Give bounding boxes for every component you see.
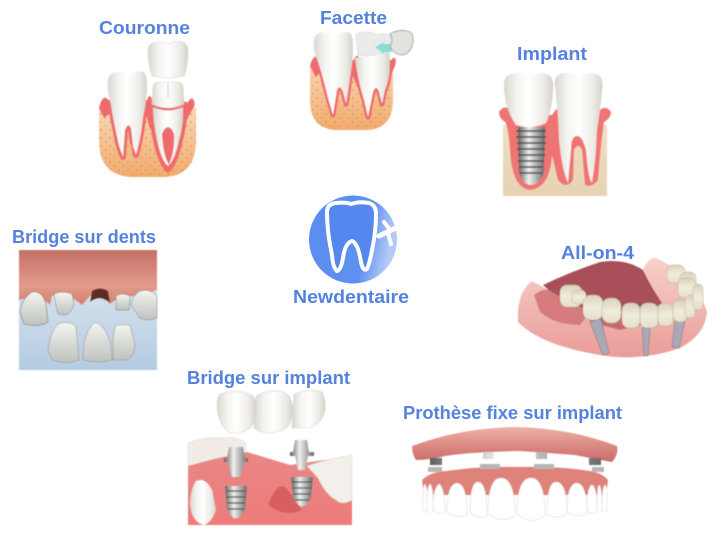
illustration: implant (499, 73, 611, 196)
teeth (20, 292, 48, 326)
heading: Couronne: Couronne (99, 18, 190, 38)
heading: All-on-4: All-on-4 (561, 243, 634, 263)
illustration: all-on-4 (518, 258, 707, 357)
heading: Implant: Implant (517, 44, 587, 64)
illustration: prothèse fixe sur implant (412, 427, 617, 521)
icon: tooth (327, 202, 376, 271)
heading: Newdentaire: Newdentaire (293, 287, 409, 307)
panel: logo Newdentaire (293, 196, 409, 307)
implant abutments (224, 447, 248, 477)
panel: couronne (99, 18, 196, 177)
panel: prothèse fixe sur implant (403, 403, 622, 521)
implants (590, 319, 609, 355)
illustration: bridge sur implant (188, 390, 352, 525)
heading: Facette: Facette (320, 8, 387, 28)
heading: Prothèse fixe sur implant: Prothèse fixe sur implant (403, 403, 622, 423)
panel: implant (499, 44, 611, 196)
illustration: facette (310, 30, 413, 130)
heading: Bridge sur implant: Bridge sur implant (187, 368, 350, 388)
bridge crowns (217, 390, 325, 433)
icon: plane (379, 222, 396, 244)
icon: arrow (375, 42, 392, 54)
illustration: couronne (99, 41, 196, 177)
heading: Bridge sur dents: Bridge sur dents (12, 227, 156, 247)
panel: all-on-4 (518, 243, 707, 357)
panel: bridge sur dents (12, 227, 157, 370)
logo badge (309, 196, 397, 284)
illustration: bridge sur dents (19, 250, 157, 370)
panel: facette (310, 8, 413, 130)
panel: bridge sur implant (187, 368, 352, 525)
teeth arc (560, 265, 703, 328)
